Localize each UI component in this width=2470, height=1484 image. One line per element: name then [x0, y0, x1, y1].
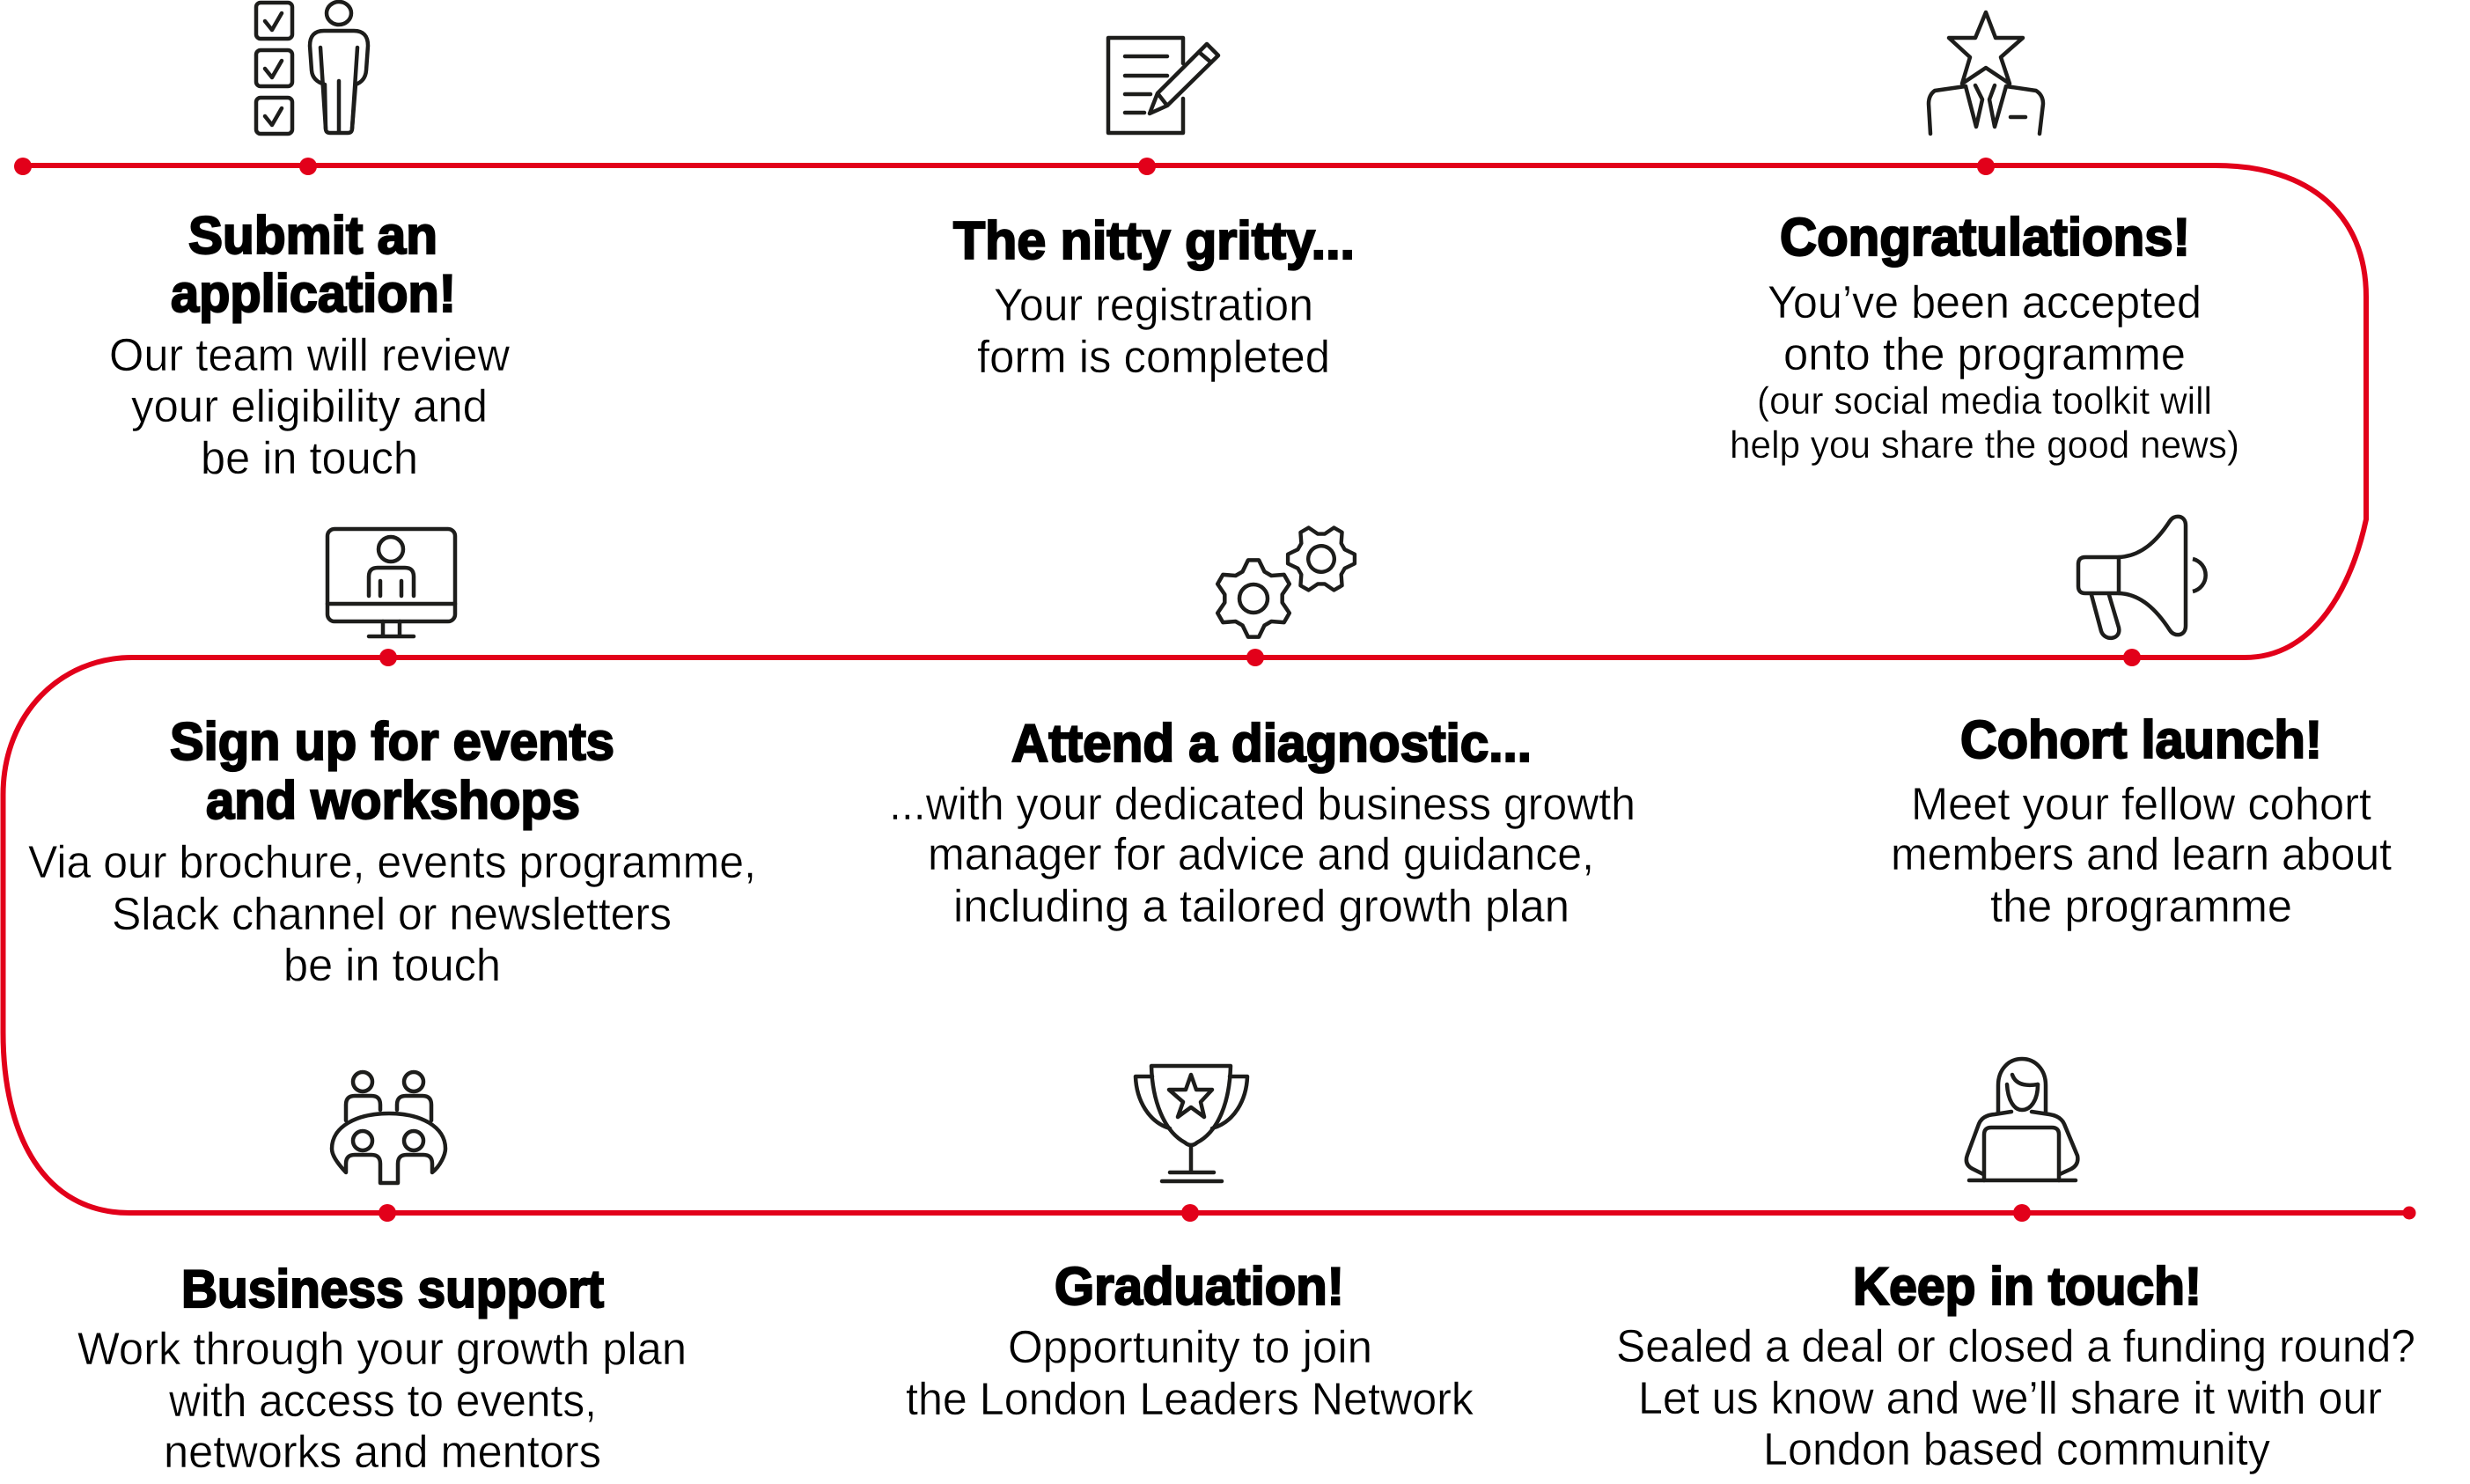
icon: checklist and person [256, 2, 368, 134]
step: attend a diagnostic: including a tailored growth plan [953, 881, 1569, 932]
step: cohort launch: members and learn about [1891, 829, 2393, 880]
step: congratulations: onto the programme [1783, 329, 2186, 380]
step: keep in touch: Let us know and we’ll share it with our [1638, 1373, 2382, 1424]
icon: meeting table [332, 1072, 445, 1183]
icon: star person [1929, 12, 2043, 134]
step: keep in touch [1616, 1257, 2415, 1475]
icon: form and pencil [1108, 38, 1218, 133]
step: submit an application: Submit an [188, 206, 437, 265]
step: the nitty gritty: Your registration [994, 280, 1313, 331]
step: the nitty gritty: form is completed [977, 332, 1330, 383]
step: submit an application [109, 206, 510, 484]
step: keep in touch: Sealed a deal or closed a funding round? [1616, 1321, 2415, 1372]
step: business support [77, 1260, 687, 1478]
step: attend a diagnostic: Attend a diagnostic... [1011, 714, 1532, 773]
step: graduation: Opportunity to join [1008, 1322, 1372, 1373]
icon: megaphone [2078, 517, 2206, 638]
step: cohort launch: the programme [1990, 881, 2292, 932]
step: cohort launch [1891, 710, 2393, 932]
step: keep in touch: London based community [1763, 1424, 2270, 1475]
step: congratulations: (our social media toolkit will [1757, 379, 2212, 422]
step: submit an application: application! [171, 264, 456, 323]
icon: gears [1217, 514, 1365, 637]
step: graduation [906, 1257, 1474, 1425]
step: keep in touch: Keep in touch! [1853, 1257, 2202, 1316]
step: congratulations: Congratulations! [1780, 208, 2190, 267]
step: cohort launch: Meet your fellow cohort [1911, 779, 2372, 830]
step: business support: Work through your growth plan [77, 1324, 687, 1375]
step: graduation: Graduation! [1055, 1257, 1344, 1316]
step: sign up for events: be in touch [283, 940, 501, 991]
timeline: red winding path [4, 158, 2415, 1222]
step: submit an application: be in touch [201, 433, 418, 484]
step: business support: with access to events, [168, 1376, 597, 1427]
step: congratulations: You’ve been accepted [1768, 277, 2202, 328]
step: graduation: the London Leaders Network [906, 1374, 1474, 1425]
step: congratulations: help you share the good news) [1730, 423, 2239, 467]
step: sign up for events [28, 712, 756, 991]
step: the nitty gritty: The nitty gritty... [953, 211, 1355, 270]
step: congratulations [1730, 208, 2239, 467]
icon: video monitor [327, 529, 455, 636]
step: attend a diagnostic: manager for advice and guidance, [928, 829, 1594, 880]
step: attend a diagnostic [889, 714, 1636, 932]
step: submit an application: Our team will review [109, 330, 510, 381]
icon: trophy [1136, 1066, 1247, 1181]
step: sign up for events: Sign up for events [170, 712, 614, 771]
step: the nitty gritty [953, 211, 1355, 383]
icon: woman at laptop [1966, 1059, 2077, 1180]
step: sign up for events: Via our brochure, events programme, [28, 837, 756, 888]
step: attend a diagnostic: ...with your dedicated business growth [889, 779, 1636, 830]
step: submit an application: your eligibility and [131, 381, 488, 432]
step: sign up for events: and workshops [206, 771, 580, 830]
step: sign up for events: Slack channel or newsletters [112, 889, 672, 940]
step: business support: Business support [181, 1260, 604, 1319]
step: business support: networks and mentors [164, 1427, 601, 1478]
step: cohort launch: Cohort launch! [1960, 710, 2322, 769]
